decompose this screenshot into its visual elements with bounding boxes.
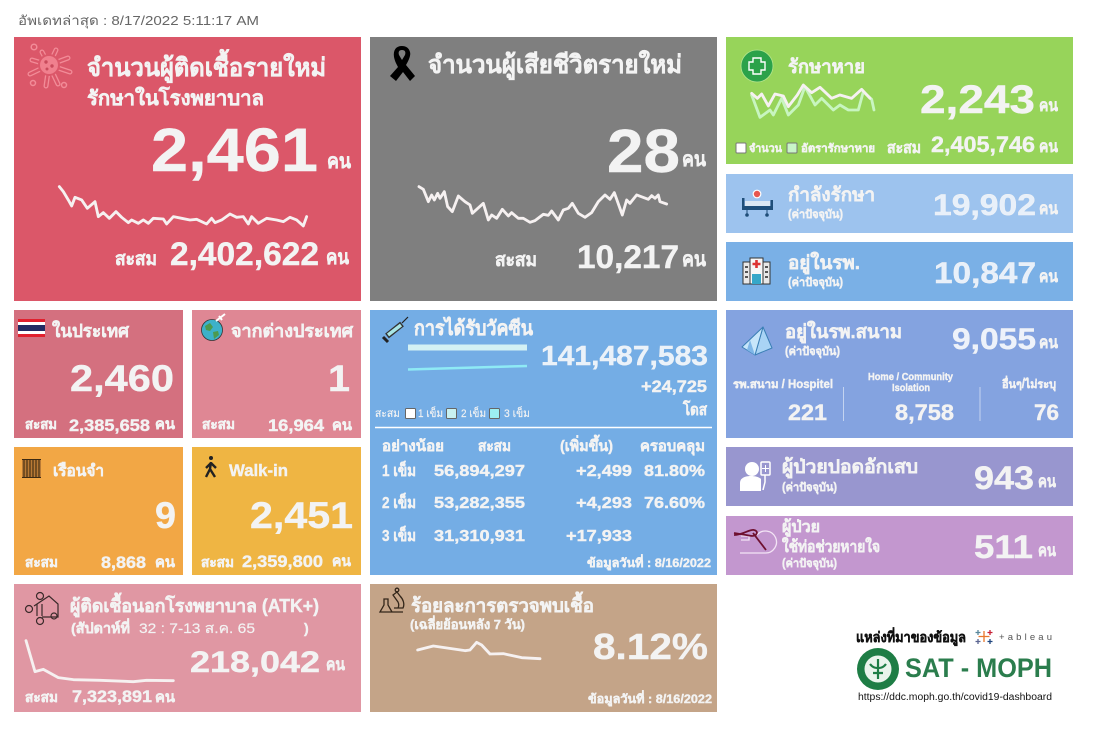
cumulative number: 2,402,622	[170, 236, 319, 272]
daily increase: +24,725	[641, 377, 707, 396]
panel note: (ค่าปัจจุบัน)	[782, 557, 837, 571]
number: 2,460	[70, 358, 174, 399]
panel: field hospital	[726, 310, 1073, 438]
panel title: ผู้ป่วยปอดอักเสบ	[782, 456, 918, 479]
unit: คน	[1038, 472, 1056, 491]
panel note: (ค่าปัจจุบัน)	[788, 208, 843, 222]
number: 10,847	[934, 257, 1036, 290]
unit: doses: โดส	[682, 399, 707, 419]
column: hospitel	[733, 379, 833, 425]
panel title: ผู้ติดเชื้อนอกโรงพยาบาล (ATK+)	[70, 592, 319, 618]
legend: จำนวน	[749, 142, 782, 155]
cumulative unit: คน	[332, 417, 353, 434]
panel: new deaths	[370, 37, 717, 301]
big number: deaths: 28	[607, 117, 680, 185]
legend: 2 เข็ม	[461, 406, 486, 420]
dose bars	[408, 348, 527, 370]
cumulative label: สะสม	[495, 250, 537, 271]
panel: prison	[14, 447, 183, 575]
row: dose 1: 56,894,297	[434, 463, 525, 480]
table header: อย่างน้อย	[382, 438, 444, 455]
number: 218,042	[190, 646, 320, 679]
cumulative number: 16,964	[268, 416, 325, 435]
logo wordmark: SAT - MOPH	[905, 653, 1052, 683]
cumulative unit: คน	[155, 689, 176, 706]
panel title: กำลังรักษา	[788, 185, 875, 206]
number: 2,451	[250, 495, 353, 536]
panel note: (เฉลี่ยย้อนหลัง 7 วัน)	[410, 615, 525, 632]
sparkline: weekly ATK	[26, 641, 173, 682]
legend	[736, 142, 875, 155]
cumulative label: สะสม	[202, 416, 235, 432]
column: home isolation: Isolation	[892, 382, 930, 394]
cumulative unit: คน	[155, 416, 176, 433]
column: other	[1002, 375, 1059, 425]
number: 1	[328, 358, 350, 399]
cumulative unit: คน	[332, 553, 352, 570]
panel note: (ค่าปัจจุบัน)	[785, 345, 840, 359]
row: dose 3: 3 เข็ม	[382, 524, 416, 545]
cumulative number: 2,405,746	[931, 132, 1035, 157]
column: hospitel: 221	[788, 400, 827, 425]
column: home isolation	[868, 371, 954, 425]
data date: ข้อมูลวันที่ : 8/16/2022	[588, 690, 712, 707]
source url: https://ddc.moph.go.th/covid19-dashboard	[858, 692, 1052, 703]
panel title line 2: ใช้ท่อช่วยหายใจ	[782, 537, 880, 556]
panel title: อยู่ในรพ.	[788, 251, 860, 275]
icon: hospital bed	[742, 190, 773, 217]
panel: imported	[192, 310, 361, 438]
panel note: (ค่าปัจจุบัน)	[782, 481, 837, 495]
row: dose 1	[382, 459, 705, 480]
icon: hospital building	[743, 258, 770, 284]
tableau wordmark: +ableau	[999, 632, 1052, 643]
icon: black ribbon	[390, 46, 415, 81]
panel: ATK positive outside hospital	[14, 584, 361, 712]
unit: คน	[682, 149, 706, 171]
row: dose 3: 31,310,931	[434, 528, 525, 545]
big number: new cases: 2,461	[151, 116, 318, 184]
panel subtitle: รักษาในโรงพยาบาล	[87, 86, 264, 110]
week label	[71, 618, 309, 636]
table header: (เพิ่มขึ้น)	[560, 434, 613, 455]
sparkline: daily deaths	[419, 187, 667, 222]
row: dose 2: 53,282,355	[434, 495, 525, 512]
legend	[375, 406, 530, 420]
legend: สะสม	[375, 408, 400, 420]
row: dose 2	[382, 491, 705, 512]
icon: tableau mark	[976, 630, 992, 644]
column: other: อื่นๆ/ไม่ระบุ	[1002, 375, 1056, 392]
cumulative label: สะสม	[25, 554, 58, 570]
column: other: 76	[1034, 400, 1059, 425]
panel title: อยู่ในรพ.สนาม	[785, 320, 902, 344]
row: dose 3	[382, 524, 632, 545]
unit: คน	[1039, 199, 1058, 218]
cumulative unit: คน	[326, 247, 349, 269]
big number: recovered: 2,243	[920, 78, 1035, 122]
total doses: 141,487,583	[541, 340, 708, 371]
panel title: รักษาหาย	[788, 57, 865, 78]
legend: 3 เข็ม	[504, 406, 530, 420]
last updated timestamp: อัพเดทล่าสุด : 8/17/2022 5:11:17 AM	[18, 13, 259, 29]
cumulative number: 7,323,891	[72, 687, 152, 706]
cumulative number: 2,385,658	[69, 416, 150, 435]
cumulative label: สะสม	[25, 689, 58, 705]
cumulative label: สะสม	[25, 416, 57, 432]
cumulative number: 10,217	[577, 239, 679, 275]
cumulative unit: คน	[155, 554, 176, 571]
source block	[856, 627, 1052, 703]
panel title: จำนวนผู้เสียชีวิตรายใหม่	[428, 49, 682, 81]
sparkline: daily cases	[59, 187, 307, 226]
panel title: ในประเทศ	[52, 320, 130, 341]
panel title: Walk-in	[229, 461, 288, 480]
column: home isolation: Home / Community	[868, 371, 953, 383]
row: dose 3: +17,933	[566, 528, 632, 545]
number: 511	[974, 529, 1033, 565]
panel title: จำนวนผู้ติดเชื้อรายใหม่	[87, 48, 326, 84]
row: dose 2: +4,293	[576, 495, 632, 512]
unit: คน	[326, 655, 345, 674]
row: dose 1: +2,499	[576, 463, 632, 480]
panel: walk-in	[192, 447, 361, 575]
cumulative label: สะสม	[887, 140, 921, 157]
cumulative unit: คน	[1039, 137, 1058, 156]
panel title: เรือนจำ	[53, 462, 104, 480]
icon: globe with plane	[202, 314, 225, 340]
panel title: จากต่างประเทศ	[231, 321, 354, 341]
panel title line 1: ผู้ป่วย	[782, 518, 820, 538]
cumulative number: 2,359,800	[242, 552, 323, 571]
unit: คน	[327, 151, 351, 173]
cumulative number: 8,868	[101, 553, 146, 572]
source label: แหล่งที่มาของข้อมูล	[856, 627, 966, 646]
panel note: (ค่าปัจจุบัน)	[788, 276, 843, 290]
table header: ครอบคลุม	[640, 438, 705, 456]
unit: คน	[1039, 333, 1058, 352]
panel: under treatment	[726, 174, 1073, 233]
legend: 1 เข็ม	[418, 406, 443, 420]
number: 9	[155, 495, 176, 536]
number: 19,902	[933, 189, 1036, 222]
panel: pneumonia	[726, 447, 1073, 506]
cumulative unit: คน	[682, 249, 706, 271]
data date: ข้อมูลวันที่ : 8/16/2022	[587, 554, 711, 571]
table header	[382, 434, 705, 456]
week label: (สัปดาห์ที่	[71, 618, 130, 636]
unit: คน	[1038, 541, 1056, 560]
unit: คน	[1039, 96, 1058, 115]
week label: 32 : 7-13 ส.ค. 65	[139, 620, 255, 636]
panel: positivity rate	[370, 584, 717, 712]
icon: microscope and flask	[380, 588, 404, 612]
panel: vaccination	[370, 310, 717, 575]
row: dose 1: 81.80%	[644, 463, 705, 480]
icon: home isolation network	[26, 592, 58, 624]
icon: walking person	[206, 456, 216, 477]
icon: Thai flag	[18, 319, 45, 337]
sparkline: recovered	[752, 85, 874, 117]
week label: )	[304, 620, 309, 636]
legend: อัตรารักษาหาย	[801, 142, 875, 155]
unit: คน	[1039, 267, 1058, 286]
panel: new hospital cases	[14, 37, 361, 301]
cumulative label: สะสม	[201, 554, 234, 570]
number: 943	[974, 460, 1034, 496]
icon: syringe	[383, 317, 408, 342]
icon: green cross	[741, 50, 773, 82]
row: dose 2: 2 เข็ม	[382, 491, 416, 512]
icon: prison bars	[22, 459, 41, 478]
panel title: ร้อยละการตรวจพบเชื้อ	[411, 591, 594, 617]
panel: ventilator	[726, 516, 1073, 575]
row: dose 2: 76.60%	[644, 495, 705, 512]
table header: สะสม	[478, 438, 511, 455]
number: 9,055	[952, 323, 1036, 356]
panel: recovered	[726, 37, 1073, 164]
panel: in hospital	[726, 242, 1073, 301]
logo: ministry seal	[857, 648, 899, 690]
panel title: การได้รับวัคซีน	[414, 316, 533, 340]
cumulative label: สะสม	[115, 249, 157, 270]
number: 8.12%	[593, 626, 708, 667]
icon: virus	[30, 44, 70, 88]
sparkline: positivity	[418, 642, 540, 659]
row: dose 1: 1 เข็ม	[382, 459, 416, 480]
column: hospitel: รพ.สนาม / Hospitel	[733, 379, 833, 391]
icon: breathing tube	[734, 530, 776, 553]
icon: tent	[742, 327, 772, 355]
icon: patient with IV drip	[740, 462, 770, 491]
panel: domestic	[14, 310, 183, 438]
column: home isolation: 8,758	[895, 400, 954, 425]
